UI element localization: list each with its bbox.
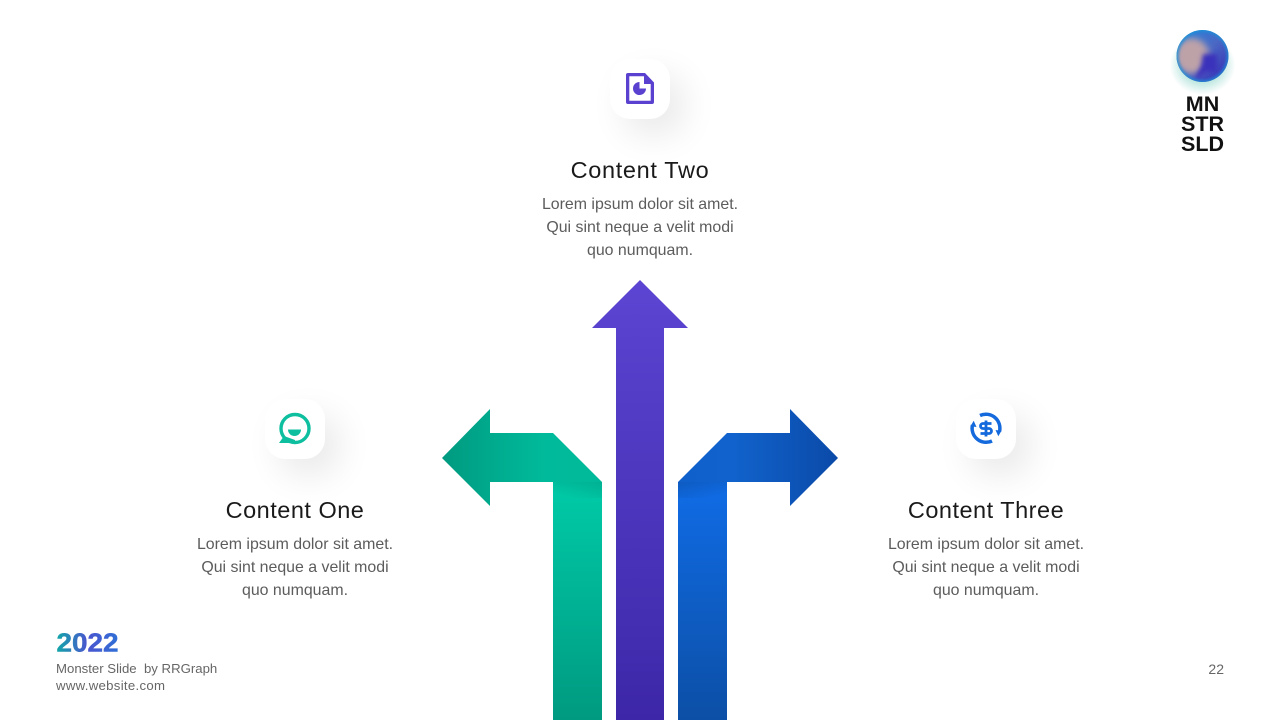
footer: credits: www.website.com [56, 678, 165, 692]
text block: Lorem ipsum dolor sit amet. [197, 536, 393, 553]
page number: 22 [1208, 661, 1224, 677]
arrow: left [442, 409, 602, 720]
arrow: up [592, 280, 688, 720]
logo wordmark: MN [1186, 92, 1219, 116]
footer: credits: Monster Slide by RRGraph [56, 661, 217, 676]
text block: Qui sint neque a velit modi [201, 559, 389, 576]
text block: Lorem ipsum dolor sit amet. [542, 196, 738, 213]
arrow: right [678, 409, 838, 720]
icon: document chart [610, 59, 670, 119]
text block: quo numquam. [587, 242, 693, 259]
heading: Content Two [571, 157, 709, 183]
text block: Qui sint neque a velit modi [546, 219, 734, 236]
icon: dollar exchange [956, 399, 1016, 459]
heading: Content Three [908, 497, 1064, 523]
text block: Qui sint neque a velit modi [892, 559, 1080, 576]
icon: logo sphere [1172, 30, 1234, 94]
logo wordmark: SLD [1181, 132, 1224, 156]
panel: content three [888, 412, 1084, 599]
logo wordmark [1181, 92, 1224, 156]
text block [888, 536, 1084, 599]
logo wordmark: STR [1181, 112, 1224, 136]
footer: year: 2022 [56, 628, 118, 658]
logo [1172, 30, 1234, 156]
footer: credits [56, 661, 217, 692]
text block [197, 536, 393, 599]
text block: Lorem ipsum dolor sit amet. [888, 536, 1084, 553]
text block [542, 196, 738, 259]
text block: quo numquam. [242, 582, 348, 599]
heading: Content One [226, 497, 364, 523]
text block: quo numquam. [933, 582, 1039, 599]
panel: content two [542, 73, 738, 259]
panel: content one [197, 412, 393, 599]
icon: chat smile [265, 399, 325, 459]
